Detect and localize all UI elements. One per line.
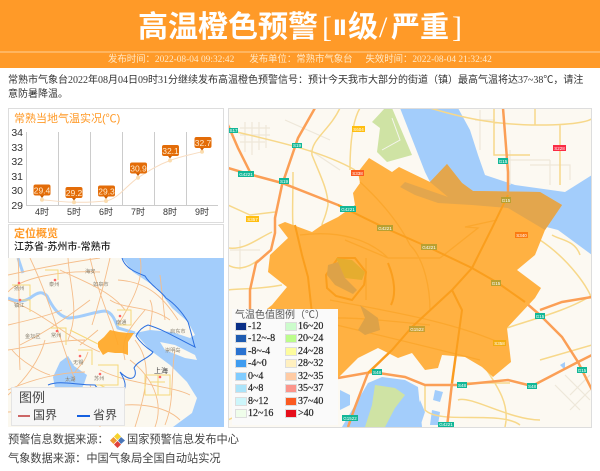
map legend: boundaries [11, 387, 125, 426]
x axis labels: 5时 [67, 206, 81, 217]
legend row: 28~32 [285, 358, 323, 369]
icon: national warning centre logo [110, 433, 125, 448]
x axis labels: 4时 [35, 206, 49, 217]
road number badges [229, 126, 587, 427]
city labels: 崇明岛 [165, 346, 181, 354]
provincial boundary [48, 258, 195, 395]
x axis labels: 6时 [99, 206, 113, 217]
legend row: 37~40 [285, 396, 324, 407]
temperature line [42, 152, 202, 202]
national boundary label: 国界 [33, 408, 57, 422]
legend row: -12: -12 [248, 321, 261, 332]
x axis labels: 9时 [195, 206, 209, 217]
road number badges: S357 [247, 217, 258, 222]
road number badges: G15 [502, 198, 511, 203]
header banner [0, 0, 600, 68]
warning area over the river [400, 164, 562, 230]
x axis labels: 8时 [163, 206, 177, 217]
road number badges: S338 [352, 171, 363, 176]
legend row: 20~24: 20~24 [298, 333, 323, 344]
legend row: 12~16: 12~16 [248, 408, 273, 419]
city labels: 无锡 [73, 358, 83, 366]
city labels: 如皋市 [93, 280, 109, 288]
y axis labels: 33 [11, 142, 23, 154]
data labels: 29.3 [98, 186, 115, 196]
y axis labels: 29 [11, 200, 23, 212]
data labels: 29.2 [66, 188, 83, 198]
road number badges: G15 [499, 159, 508, 164]
data labels: 32.7 [195, 138, 212, 148]
inner road lines [270, 182, 505, 360]
yangtze river [400, 108, 592, 255]
line chart: hourly temperature [11, 127, 218, 217]
y axis labels: 32 [11, 156, 23, 168]
road number badges: S48 [373, 370, 381, 375]
warning data source: 预警信息数据来源： [8, 434, 109, 446]
road number badges: G1522 [343, 416, 357, 421]
legend row: 32~35: 32~35 [298, 371, 323, 382]
data labels: 32.1 [162, 146, 179, 156]
legend row: 32~35 [285, 371, 324, 382]
legend row: -4~0: -4~0 [248, 358, 267, 369]
taihu lake [53, 356, 87, 388]
city labels: 泰州 [49, 280, 59, 288]
legend row: -8~-4 [235, 346, 270, 357]
legend row: -12~-8 [235, 333, 275, 344]
city labels: 扬州 [14, 284, 24, 292]
title [138, 11, 462, 44]
city labels: 启东市 [170, 327, 186, 335]
road network [8, 258, 190, 427]
warning description text: 常熟市气象台2022年08月04日09时31分继续发布高温橙色预警信号：预计今天我市大部分的街道（镇）最高气温将达37~38℃，请注意防暑降温。 [8, 75, 583, 100]
legend row: 12~16 [235, 408, 274, 419]
city labels: 太湖 [65, 375, 75, 383]
temperature colour legend [232, 309, 338, 425]
road number badges: S48 [528, 384, 536, 389]
city labels: 海安 [85, 267, 95, 275]
yushan and shanghu patches [336, 258, 365, 280]
road number badges: G15 [492, 281, 501, 286]
yangtze river [8, 293, 135, 333]
city labels: 南通 [116, 318, 127, 326]
legend row: 16~20 [285, 321, 324, 332]
road number badges: S228 [554, 146, 565, 151]
legend row: 20~24 [285, 333, 324, 344]
x axis labels: 7时 [131, 206, 145, 217]
road number badges: G4221 [439, 422, 453, 427]
legend row: >40: >40 [298, 408, 314, 419]
y axis labels [11, 127, 23, 212]
road number badges: G15 [536, 314, 545, 319]
legend row: 4~8: 4~8 [248, 383, 263, 394]
legend title: 图例 [19, 390, 45, 405]
title: Ⅱ [333, 16, 347, 40]
yellow secondary roads [228, 108, 592, 427]
legend row: 8~12 [235, 396, 268, 407]
road number badges: S604 [353, 127, 364, 132]
legend row: -12~-8: -12~-8 [248, 333, 275, 344]
location overview map [8, 258, 224, 427]
road number badges: S19 [293, 143, 301, 148]
national boundary swatch [18, 415, 30, 417]
legend row: 24~28 [285, 346, 324, 357]
legend row: 0~4: 0~4 [248, 371, 263, 382]
title: / [379, 11, 387, 44]
weather data source: 气象数据来源：中国气象局全国自动站实况 [8, 453, 221, 465]
warning area polygon [240, 158, 562, 392]
legend row: 37~40: 37~40 [298, 396, 323, 407]
x axis labels [35, 206, 209, 217]
data labels [34, 137, 212, 200]
provincial boundary swatch [77, 415, 90, 417]
issue information line: 发布时间：2022-08-04 09:32:42 发布单位：常熟市气象台 失效时间：2022-08-04 21:32:42 [108, 55, 492, 65]
city labels: 苏州 [94, 374, 104, 382]
source name: 国家预警信息发布中心 [127, 434, 239, 446]
chongming island [160, 342, 197, 360]
city labels: 镇江 [14, 301, 24, 309]
data labels: 29.4 [34, 185, 51, 195]
road number badges: S17 [229, 128, 238, 133]
shanghai label: 上海 [154, 366, 168, 375]
city labels [14, 267, 186, 383]
data labels: 30.9 [130, 163, 147, 173]
title: [ [322, 11, 332, 44]
title: 高温橙色预警 [138, 11, 318, 44]
legend row: 35~37: 35~37 [298, 383, 323, 394]
title: 级 [348, 11, 378, 44]
legend row: 28~32: 28~32 [298, 358, 323, 369]
provincial boundary label: 省界 [93, 408, 117, 422]
map frame [228, 108, 592, 428]
title: 严重 [391, 12, 449, 44]
legend heading: 气温色值图例（℃） [235, 310, 325, 321]
road number badges: G4221 [378, 226, 392, 231]
band separator [0, 51, 600, 53]
road number badges: S358 [494, 341, 505, 346]
road number badges: S340 [516, 233, 527, 238]
legend row: -12 [235, 321, 261, 332]
road number badges: G4221 [239, 172, 253, 177]
riverside park [372, 108, 412, 162]
legend row: -4~0 [235, 358, 267, 369]
road number badges: G1522 [410, 327, 424, 332]
city markers [18, 279, 161, 378]
legend row: >40 [285, 408, 314, 419]
y axis labels: 30 [11, 185, 23, 197]
road number badges: G4221 [422, 245, 436, 250]
road number badges: G15 [578, 368, 587, 373]
location path: 江苏省-苏州市-常熟市 [14, 242, 111, 253]
inner expressways [295, 195, 525, 383]
northern water [18, 258, 23, 273]
changshu highlighted area [98, 330, 134, 355]
data points [40, 150, 204, 204]
legend row: 4~8 [235, 383, 264, 394]
y axis labels: 34 [11, 127, 23, 139]
panel: location overview [8, 224, 224, 259]
legend row: 16~20: 16~20 [298, 321, 323, 332]
warning data source [8, 433, 239, 448]
orange expressways [228, 108, 592, 427]
panel: temperature chart [8, 108, 224, 223]
title: ] [452, 11, 462, 44]
location heading: 定位概览 [14, 228, 58, 240]
sea [122, 258, 224, 427]
road number badges: S48 [458, 383, 466, 388]
legend row: -8~-4: -8~-4 [248, 346, 270, 357]
legend row: 0~4 [235, 371, 264, 382]
kuncheng lake [342, 377, 422, 427]
city labels: 金坛区 [25, 332, 41, 340]
legend row: 8~12: 8~12 [248, 396, 268, 407]
y axis labels: 31 [11, 171, 23, 183]
minor street grid [230, 110, 590, 410]
legend row: 24~28: 24~28 [298, 346, 323, 357]
chart heading: 常熟当地气温实况(℃) [14, 113, 120, 125]
road number badges: G4221 [341, 207, 355, 212]
road number badges: S19 [280, 179, 288, 184]
legend row: 35~37 [285, 383, 324, 394]
city labels: 常州 [51, 331, 61, 339]
main warning area map [229, 109, 591, 427]
